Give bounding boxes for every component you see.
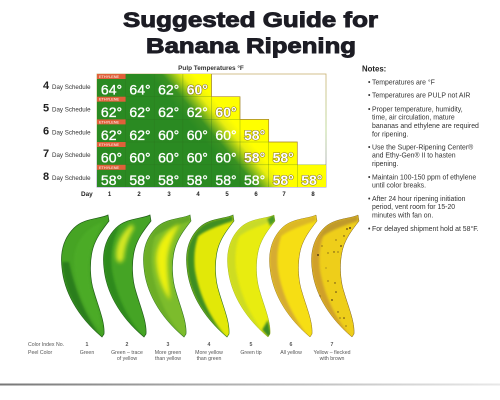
notes list: For delayed shipment hold at 58°F. bbox=[372, 225, 479, 233]
temperature values: 58° bbox=[273, 150, 294, 166]
temperature values: 60° bbox=[187, 150, 208, 166]
notes list: • bbox=[368, 196, 371, 203]
ethylene tags: ETHYLENE bbox=[99, 143, 120, 147]
day axis: 7 bbox=[282, 192, 286, 198]
peel color descriptions: Green bbox=[80, 350, 94, 356]
day axis bbox=[81, 191, 315, 198]
notes list: Temperatures are °F bbox=[372, 78, 435, 86]
ethylene tags: ETHYLENE bbox=[99, 98, 120, 102]
temperature values: 58° bbox=[187, 172, 208, 188]
temperature values: 58° bbox=[129, 172, 151, 188]
notes list: • bbox=[368, 174, 371, 181]
index numbers: 2 bbox=[126, 342, 129, 348]
notes panel bbox=[362, 64, 479, 233]
peel color descriptions: All yellow bbox=[280, 350, 302, 356]
row headers: Color Index No. bbox=[28, 342, 64, 348]
notes list: Maintain 100-150 ppm of ethylene bbox=[372, 174, 476, 181]
temperature values: 60° bbox=[215, 150, 237, 166]
day axis: 4 bbox=[196, 192, 200, 198]
banana row bbox=[62, 214, 359, 338]
notes list: Temperatures are PULP not AIR bbox=[372, 93, 470, 100]
notes list: bananas and ethylene are required bbox=[372, 123, 479, 130]
notes list: • bbox=[368, 226, 371, 233]
temperature values: 60° bbox=[215, 104, 237, 120]
notes list: minutes with fan on. bbox=[372, 212, 433, 219]
row headers bbox=[28, 342, 64, 356]
peel color descriptions: Green tip bbox=[240, 350, 262, 356]
banana 1: green bbox=[62, 215, 109, 338]
peel color descriptions: with brown bbox=[320, 356, 345, 362]
notes list: • bbox=[368, 79, 371, 86]
notes list: for ripening. bbox=[372, 131, 408, 138]
notes list: period, vent room for 15-20 bbox=[372, 204, 455, 211]
day axis: 2 bbox=[137, 192, 141, 198]
notes list: Proper temperature, humidity, bbox=[372, 106, 463, 113]
banana 4: more yellow than green bbox=[186, 215, 234, 338]
peel color descriptions: Yellow – flecked bbox=[313, 350, 351, 356]
temperature values: 58° bbox=[244, 150, 265, 166]
temperature values: 60° bbox=[158, 150, 179, 166]
peel color descriptions: of yellow bbox=[117, 356, 137, 362]
day axis: 6 bbox=[254, 192, 258, 198]
banana 6: all yellow bbox=[270, 215, 317, 338]
index numbers: 4 bbox=[208, 342, 211, 348]
temperature values: 62° bbox=[129, 127, 151, 143]
banana color index table bbox=[28, 342, 351, 362]
row headers: Peel Color bbox=[28, 350, 52, 356]
index numbers: 6 bbox=[290, 342, 293, 348]
banana 3: more green than yellow bbox=[144, 215, 191, 338]
title bbox=[123, 9, 378, 58]
notes list: • bbox=[368, 106, 371, 113]
row labels: day schedules: Day Schedule bbox=[52, 152, 91, 159]
temperature values: 58° bbox=[215, 172, 237, 188]
row labels: day schedules: 5 bbox=[43, 103, 49, 115]
notes list bbox=[368, 78, 479, 233]
notes list: • bbox=[368, 144, 371, 151]
peel color descriptions: More yellow bbox=[195, 350, 223, 356]
index numbers: 5 bbox=[250, 342, 253, 348]
temperature values: 58° bbox=[101, 172, 122, 188]
day axis: Day bbox=[81, 191, 93, 198]
row labels: day schedules bbox=[43, 80, 91, 183]
temperature values: 62° bbox=[101, 127, 122, 143]
title: Banana Ripening bbox=[146, 35, 356, 58]
temperature values: 60° bbox=[129, 150, 151, 166]
peel color descriptions: than yellow bbox=[155, 356, 181, 362]
peel color descriptions: Green – trace bbox=[111, 350, 143, 356]
notes list: After 24 hour ripening initiation bbox=[372, 196, 466, 203]
notes heading: Notes: bbox=[362, 64, 386, 74]
temperature values: 64° bbox=[129, 81, 151, 97]
index numbers: 3 bbox=[167, 342, 170, 348]
temperature values: 58° bbox=[273, 172, 294, 188]
temperature values: 58° bbox=[301, 172, 322, 188]
index numbers: 7 bbox=[331, 342, 334, 348]
row labels: day schedules: 6 bbox=[43, 125, 49, 137]
temperature values: 62° bbox=[158, 81, 179, 97]
row labels: day schedules: 4 bbox=[43, 80, 50, 92]
notes list: ripening. bbox=[372, 161, 399, 168]
day axis: 8 bbox=[311, 192, 315, 198]
row labels: day schedules: Day Schedule bbox=[52, 129, 91, 136]
index numbers: 1 bbox=[86, 342, 89, 348]
chart: ripening temperature schedule bbox=[97, 74, 326, 188]
row labels: day schedules: Day Schedule bbox=[52, 107, 91, 114]
temperature values: 64° bbox=[101, 81, 122, 97]
day axis: 3 bbox=[167, 192, 171, 198]
temperature values: 58° bbox=[244, 172, 265, 188]
banana 2: green with trace of yellow bbox=[104, 215, 151, 338]
temperature values bbox=[101, 81, 322, 188]
chart heading: pulp temperatures: Pulp Temperatures °F bbox=[178, 64, 244, 72]
ethylene tags: ETHYLENE bbox=[99, 120, 120, 124]
notes list: and Ethy-Gen® II to hasten bbox=[372, 152, 456, 160]
row labels: day schedules: Day Schedule bbox=[52, 84, 91, 91]
ethylene tags: ETHYLENE bbox=[99, 166, 120, 170]
peel color descriptions bbox=[80, 350, 351, 362]
title: Suggested Guide for bbox=[123, 9, 378, 32]
banana 7: yellow flecked with brown bbox=[312, 215, 359, 338]
notes list: Use the Super-Ripening Center® bbox=[372, 143, 473, 151]
temperature values: 60° bbox=[215, 127, 237, 143]
temperature values: 62° bbox=[187, 104, 208, 120]
ethylene tags: ETHYLENE bbox=[99, 75, 120, 79]
day axis: 1 bbox=[108, 192, 112, 198]
banana 5: green tip bbox=[228, 214, 276, 338]
temperature values: 60° bbox=[158, 127, 179, 143]
temperature values: 60° bbox=[187, 127, 208, 143]
brown flecks bbox=[317, 227, 351, 327]
temperature values: 60° bbox=[101, 150, 122, 166]
notes list: • bbox=[368, 93, 371, 100]
notes list: until color breaks. bbox=[372, 183, 426, 190]
ethylene tags bbox=[97, 74, 126, 170]
index numbers bbox=[86, 342, 334, 348]
temperature values: 58° bbox=[158, 172, 179, 188]
temperature values: 62° bbox=[158, 104, 179, 120]
day axis: 5 bbox=[225, 192, 229, 198]
row labels: day schedules: 8 bbox=[43, 171, 49, 183]
row labels: day schedules: Day Schedule bbox=[52, 175, 91, 182]
temperature values: 60° bbox=[187, 81, 208, 97]
temperature values: 62° bbox=[101, 104, 122, 120]
temperature values: 58° bbox=[244, 127, 265, 143]
peel color descriptions: than green bbox=[197, 356, 222, 362]
notes list: time, air circulation, mature bbox=[372, 115, 455, 122]
row labels: day schedules: 7 bbox=[43, 148, 49, 160]
temperature values: 62° bbox=[129, 104, 151, 120]
peel color descriptions: More green bbox=[155, 350, 181, 356]
